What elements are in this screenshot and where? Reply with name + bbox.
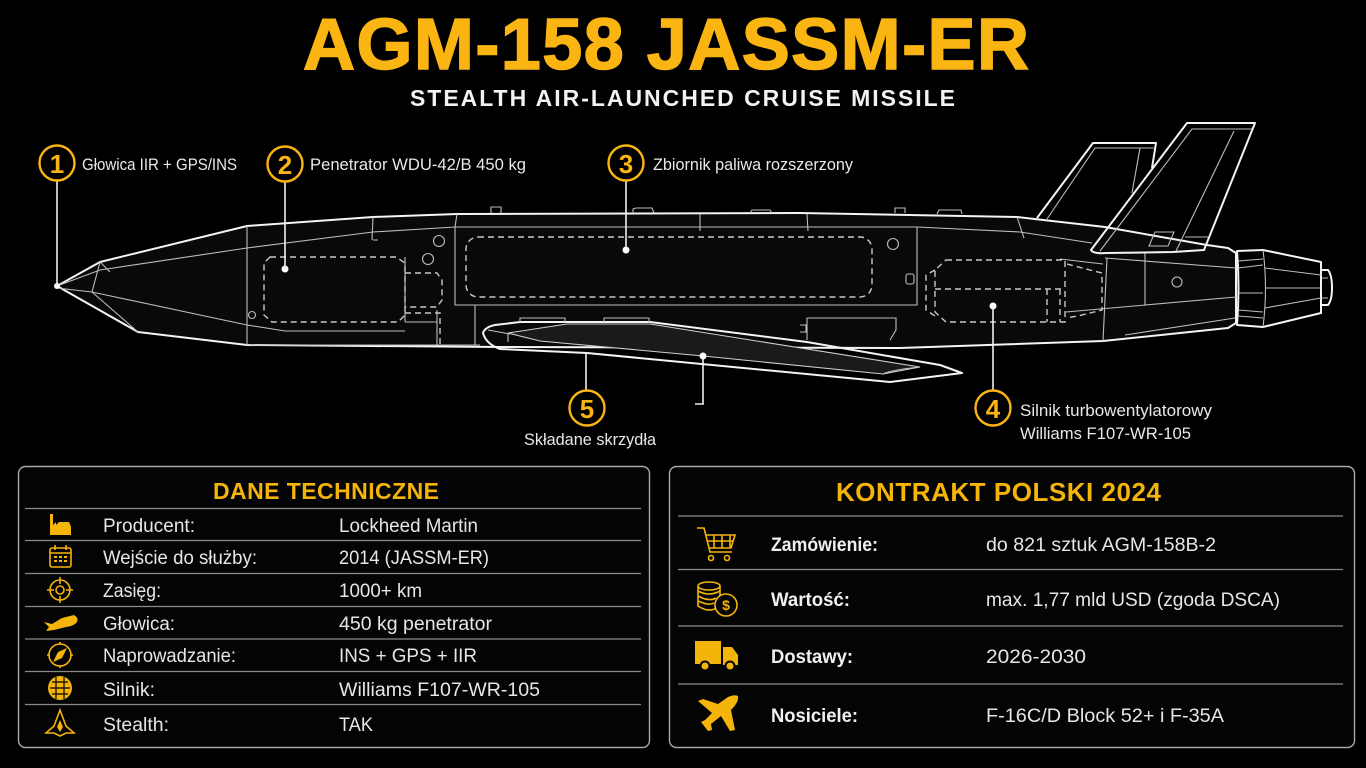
row: service entry: [50, 545, 489, 569]
row: deliveries: [695, 641, 1086, 670]
row: value: Wartość:: [771, 590, 850, 611]
panel: Polish contract: [670, 466, 1354, 748]
callout 4: engine: [976, 306, 1212, 443]
callout 2: penetrator: [268, 146, 526, 269]
heading: contract: KONTRAKT POLSKI 2024: [836, 477, 1162, 507]
callout 4: engine: 4: [986, 394, 1001, 424]
callout 1: head: [40, 146, 237, 286]
row: engine: Williams F107-WR-105: [339, 680, 540, 701]
fuel tank dashed outline: [466, 237, 872, 297]
row: deliveries: Dostawy:: [771, 647, 853, 668]
row: value: max. 1,77 mld USD (zgoda DSCA): [986, 590, 1280, 611]
callout 3: fuel tank: [608, 146, 853, 250]
row: order: do 821 sztuk AGM-158B-2: [986, 535, 1216, 556]
row: manufacturer: Lockheed Martin: [339, 516, 478, 537]
row: warhead: 450 kg penetrator: [339, 614, 493, 635]
row: carriers: Nosiciele:: [771, 706, 858, 727]
subtitle: STEALTH AIR-LAUNCHED CRUISE MISSILE: [410, 85, 955, 111]
row: carriers: F-16C/D Block 52+ i F-35A: [986, 706, 1224, 727]
row: guidance: [47, 642, 477, 668]
row: warhead: Głowica:: [103, 614, 175, 635]
row: engine: Silnik:: [103, 680, 155, 701]
row: service entry: Wejście do służby:: [103, 548, 257, 569]
missile fuselage: [57, 213, 1236, 348]
row: value: [698, 582, 1280, 616]
title: AGM-158 JASSM-ER: [303, 5, 1029, 85]
row: guidance: Naprowadzanie:: [103, 646, 236, 667]
row: guidance: INS + GPS + IIR: [339, 646, 477, 667]
engine nozzle: [1237, 250, 1332, 327]
callout 5: wings: [524, 353, 657, 449]
warhead dashed outline: [264, 257, 442, 345]
row: deliveries: 2026-2030: [986, 647, 1086, 668]
row: stealth: TAK: [339, 715, 373, 736]
row: order: [697, 528, 1216, 560]
row: manufacturer: [50, 514, 478, 537]
row: manufacturer: Producent:: [103, 516, 195, 537]
callout 5: wings: 5: [580, 394, 594, 424]
engine dashed outline: [926, 260, 1102, 322]
callout 5: wings: Składane skrzydła: [524, 430, 657, 449]
row separators: [25, 508, 641, 704]
row: stealth: [46, 710, 373, 736]
callout 2: penetrator: Penetrator WDU-42/B 450 kg: [310, 155, 526, 174]
callout 1: head: Głowica IIR + GPS/INS: [82, 155, 237, 174]
row: service entry: 2014 (JASSM-ER): [339, 548, 489, 569]
lower access panel: [800, 318, 896, 340]
callout 4: engine: Silnik turbowentylatorowy: [1020, 401, 1212, 420]
missile blueprint: [54, 123, 1332, 404]
callout 3: fuel tank: 3: [619, 149, 633, 179]
row: range: 1000+ km: [339, 581, 422, 602]
callout 3: fuel tank: Zbiornik paliwa rozszerzony: [653, 155, 853, 174]
callout 1: head: 1: [50, 149, 64, 179]
callout 4: engine: Williams F107-WR-105: [1020, 424, 1191, 443]
panel: technical data: [18, 466, 650, 748]
row: range: [47, 577, 422, 603]
row: carriers: [698, 695, 1224, 731]
heading: technical data: DANE TECHNICZNE: [213, 478, 439, 504]
row: stealth: Stealth:: [103, 715, 169, 736]
folding wing: [483, 318, 962, 382]
rear tail fin: [1037, 143, 1156, 219]
callout 2: penetrator: 2: [278, 150, 292, 180]
marker dots: [54, 246, 996, 360]
row: range: Zasięg:: [103, 581, 161, 602]
leader line: tail of wing: [695, 356, 703, 404]
row: engine: [48, 676, 540, 701]
row: warhead: [44, 614, 493, 635]
row separators: [678, 516, 1343, 684]
row: order: Zamówienie:: [771, 535, 878, 556]
top hatches: [491, 207, 962, 214]
front tail fin: [1091, 123, 1255, 253]
row: value: $: [722, 597, 730, 613]
